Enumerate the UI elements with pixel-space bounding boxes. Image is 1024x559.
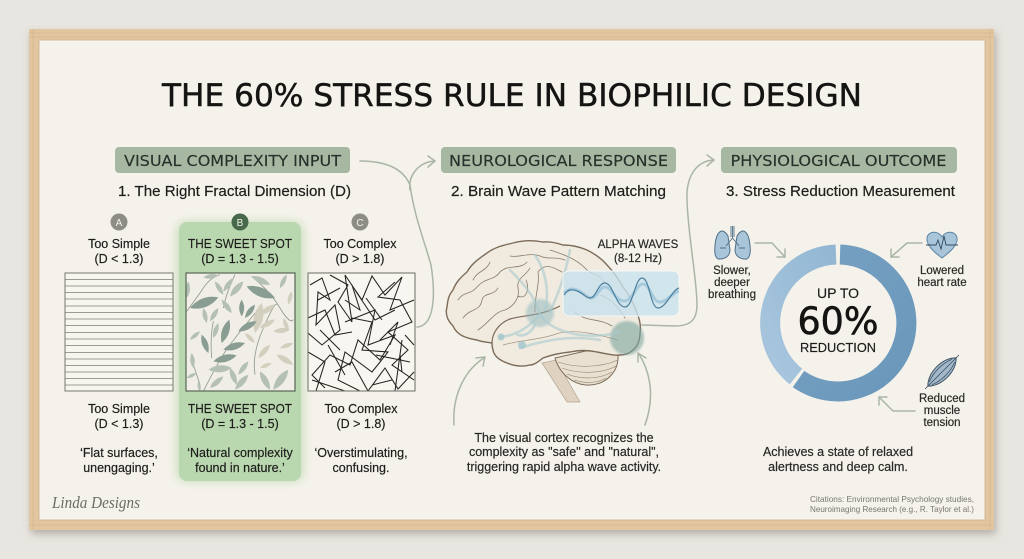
subheading 1: 1. The Right Fractal Dimension (D) [118, 184, 351, 200]
label: breathing: deeper [714, 277, 750, 289]
column B [185, 214, 295, 475]
label bottom A [88, 402, 150, 431]
arrow: input to neurological [360, 156, 435, 327]
badge A: A [116, 218, 123, 229]
column C [308, 214, 415, 475]
cerebellum [555, 350, 618, 385]
donut centre text: UP TO [817, 285, 859, 301]
label top A [88, 237, 150, 266]
quote B: ‘Natural complexity [187, 446, 294, 460]
heading: neurological response [441, 147, 676, 173]
sulci [458, 250, 625, 330]
arrow: neurological to physiological [642, 155, 714, 326]
icon: muscle [920, 350, 964, 394]
badge C: C [356, 218, 364, 229]
image: leaf pattern [185, 273, 295, 391]
label top B: THE SWEET SPOT [188, 237, 292, 251]
badge C [352, 214, 368, 230]
heading: visual complexity input: VISUAL COMPLEXITY INPUT [124, 152, 342, 170]
label top C: (D > 1.8) [336, 252, 384, 266]
alpha waves label: (8-12 Hz) [614, 253, 662, 265]
donut centre text [798, 285, 878, 355]
label: heart rate [917, 265, 967, 289]
label bottom B: THE SWEET SPOT [188, 402, 292, 416]
citations: Neuroimaging Research (e.g., R. Taylor et al.) [810, 504, 974, 514]
heading: visual complexity input [115, 147, 350, 173]
alpha waves label [598, 239, 679, 265]
badge B: B [237, 218, 244, 229]
label top A: (D < 1.3) [95, 252, 143, 266]
brain explanation text: The visual cortex recognizes the [474, 431, 654, 445]
quote B: found in nature.’ [195, 461, 285, 475]
badge A [110, 214, 128, 230]
alpha waves label: ALPHA WAVES [598, 239, 679, 251]
label: breathing: Slower, [713, 265, 751, 277]
quote C: ‘Overstimulating, [314, 446, 408, 460]
label top A: Too Simple [88, 237, 150, 251]
image: flat lines [65, 273, 173, 391]
label: muscle tension: Reduced [919, 393, 965, 405]
brain illustration [446, 241, 644, 402]
quote A [80, 446, 158, 475]
label: muscle tension: tension [923, 417, 961, 429]
outcome text: Achieves a state of relaxed [763, 445, 913, 459]
signature: Linda Designs [51, 493, 140, 512]
subheading 2: 2. Brain Wave Pattern Matching [451, 184, 666, 200]
citations: Citations: Environmental Psychology studies, [810, 494, 974, 504]
badge B [232, 214, 248, 230]
arrow: heart rate [891, 243, 922, 257]
label top C [324, 237, 397, 266]
arrow: to temporal lobe [454, 357, 485, 425]
donut chart 60% [770, 254, 906, 391]
label bottom B: (D = 1.3 - 1.5) [201, 417, 279, 431]
donut centre text: REDUCTION [800, 340, 876, 355]
label: breathing: breathing [708, 289, 756, 301]
brain explanation text [467, 431, 661, 474]
label: breathing [708, 265, 756, 301]
label top B: (D = 1.3 - 1.5) [201, 252, 279, 266]
heading: physiological outcome: PHYSIOLOGICAL OUTCOME [730, 152, 946, 170]
cerebrum [446, 241, 640, 366]
quote A: unengaging.’ [83, 461, 155, 475]
label: muscle tension: muscle [924, 405, 960, 417]
brain stem [542, 360, 580, 402]
label bottom C: (D > 1.8) [337, 417, 385, 431]
highlighted cortex regions [526, 299, 554, 327]
icon: lungs [715, 226, 750, 259]
label bottom A: Too Simple [88, 402, 150, 416]
arrow: breathing [755, 243, 785, 257]
quote A: ‘Flat surfaces, [80, 446, 158, 460]
label bottom B [188, 402, 292, 431]
label top B [188, 237, 292, 266]
outcome text [763, 445, 913, 474]
outcome text: alertness and deep calm. [768, 460, 908, 474]
label bottom A: (D < 1.3) [95, 417, 143, 431]
quote C [314, 446, 408, 475]
brain explanation text: triggering rapid alpha wave activity. [467, 460, 661, 474]
label bottom C [325, 402, 398, 431]
quote B [187, 446, 294, 475]
column A [65, 214, 173, 475]
icon: heart [926, 232, 958, 258]
label: heart rate: Lowered [920, 265, 964, 277]
heading: physiological outcome [721, 147, 957, 173]
panel: sweet spot highlight [177, 222, 303, 481]
label top C: Too Complex [324, 237, 397, 251]
quote C: confusing. [333, 461, 389, 475]
heading: neurological response: NEUROLOGICAL RESPONSE [449, 152, 668, 170]
brain explanation text: complexity as "safe" and "natural", [469, 445, 659, 459]
alpha wave box [563, 271, 679, 316]
label bottom C: Too Complex [325, 402, 398, 416]
temporal lobe [492, 306, 560, 343]
arrow: to visual cortex [638, 353, 651, 425]
arrow: muscle tension [879, 397, 915, 411]
donut centre text: 60% [798, 300, 878, 343]
subheading 3: 3. Stress Reduction Measurement [726, 184, 955, 200]
citations [810, 494, 974, 514]
label: heart rate: heart rate [917, 277, 967, 289]
title: THE 60% STRESS RULE IN BIOPHILIC DESIGN [161, 78, 862, 114]
label: muscle tension [919, 393, 965, 429]
image: chaotic fractal lines [308, 273, 415, 391]
neural pathways [500, 250, 620, 348]
